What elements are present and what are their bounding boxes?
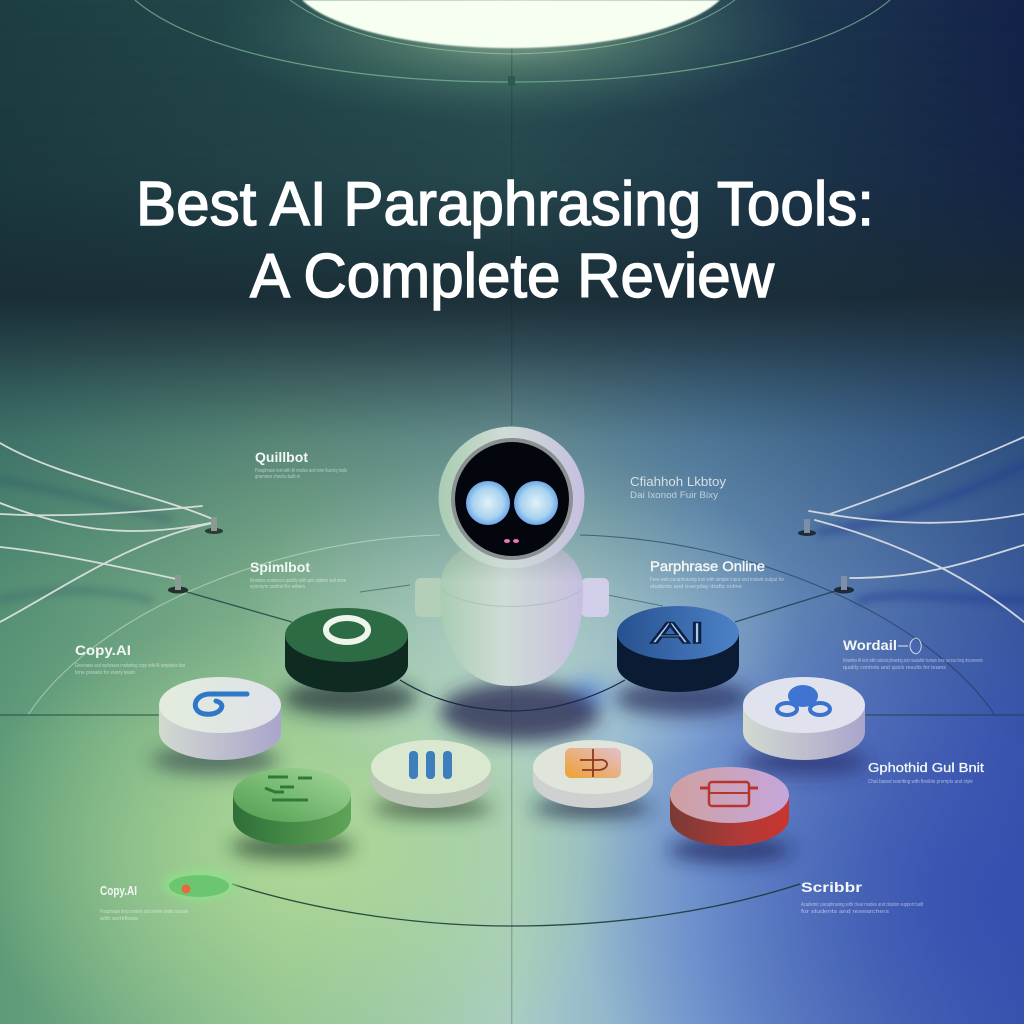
label: Wordail: [843, 637, 983, 671]
label: Parphrase Online: students and everyday drafts online: [650, 584, 742, 590]
label: Parphrase Online: [650, 558, 784, 590]
label: Gphothid Gul Bnit: Chat based rewriting with flexible prompts and style: [868, 779, 973, 785]
puck: white with three bars: [371, 740, 491, 808]
puck: white with orange badge: [533, 740, 653, 808]
title: [136, 170, 874, 311]
label: Spimlbot: Rewrites sentences quickly with spin options and more: [250, 578, 346, 584]
label: Chahhoh Library: Cfiahhoh Lkbtoy: [630, 474, 727, 489]
label: Copy.AI lower: with workflows: [99, 916, 138, 922]
floor shadows: [151, 678, 869, 863]
label: Spimlbot: [250, 559, 346, 590]
label: Quillbot: Quillbot: [255, 449, 308, 465]
right wire bundle: [809, 437, 1024, 622]
label: Copy.AI upper: Copy.AI: [75, 642, 131, 658]
label: Wordail: quality controls and quick results for teams: [843, 665, 946, 671]
label: Scribbr: Scribbr: [801, 879, 863, 895]
label: Parphrase Online: Free web paraphrasing tool with simple input and instant output for: [650, 577, 784, 583]
robot face screen: [451, 438, 573, 560]
label: Parphrase Online: Parphrase Online: [650, 558, 765, 574]
robot arm left: [415, 578, 443, 617]
robot mouth lights: [504, 539, 519, 543]
puck: white with blue node icon: [743, 677, 865, 760]
label: Quillbot: Paraphrase text with AI modes and tone fluency tools: [255, 468, 347, 474]
title: A Complete Review: [250, 242, 774, 311]
robot eye left: [466, 481, 510, 525]
label: Gphothid Gul Bnit: Gphothid Gul Bnit: [868, 761, 985, 775]
puck: AI dark blue: AI: [651, 617, 705, 650]
puck: red with panel glyph: [670, 767, 789, 846]
label: Copy.AI lower: Paraphrase long content and rewrite drafts at scale: [100, 909, 188, 915]
left connectors: [168, 517, 223, 594]
label: Copy.AI lower: [99, 883, 188, 922]
robot head: [438, 426, 584, 568]
label: Chahhoh Library: Dai Ixonod Fuir Bixy: [630, 490, 718, 501]
glowing green pill: [162, 869, 238, 901]
label: Quillbot: grammar checks built in: [255, 474, 300, 480]
label: Copy.AI upper: Generates and rephrases marketing copy with AI templates fast: [75, 663, 185, 669]
ceiling lamp: [135, 0, 890, 86]
label: Wordail: Wordail: [843, 637, 897, 653]
label: Scribbr: [801, 879, 923, 915]
title: Best AI Paraphrasing Tools:: [136, 170, 874, 239]
label: Copy.AI lower: Copy.AI: [100, 883, 137, 898]
label: Spimlbot: synonym control for writers: [250, 584, 305, 590]
robot arm right: [581, 578, 609, 617]
label: Copy.AI upper: tone presets for every team: [75, 670, 135, 676]
puck: white with blue swirl: [159, 677, 281, 760]
label: Chahhoh Library: [630, 474, 727, 501]
puck: green with glyph: [233, 768, 351, 845]
right connectors: [798, 519, 854, 594]
robot eye right: [514, 481, 558, 525]
puck: Quillbot dark green: [285, 608, 408, 692]
orbit arc under robot: [400, 680, 625, 711]
label: Quillbot: [255, 449, 347, 480]
label: Gphothid Gul Bnit: [868, 761, 985, 785]
puck: AI dark blue: [617, 606, 739, 692]
label: Scribbr: for students and researchers: [801, 909, 889, 915]
left wire bundle: [0, 443, 215, 622]
label: Copy.AI upper: [75, 642, 185, 676]
circuit rings on the floor: [0, 535, 1024, 926]
label: Spimlbot: Spimlbot: [250, 559, 310, 575]
label: Scribbr: Academic paraphrasing with clear modes and citation support built: [801, 902, 923, 908]
robot body: [440, 538, 583, 686]
robot mascot: [415, 426, 609, 686]
